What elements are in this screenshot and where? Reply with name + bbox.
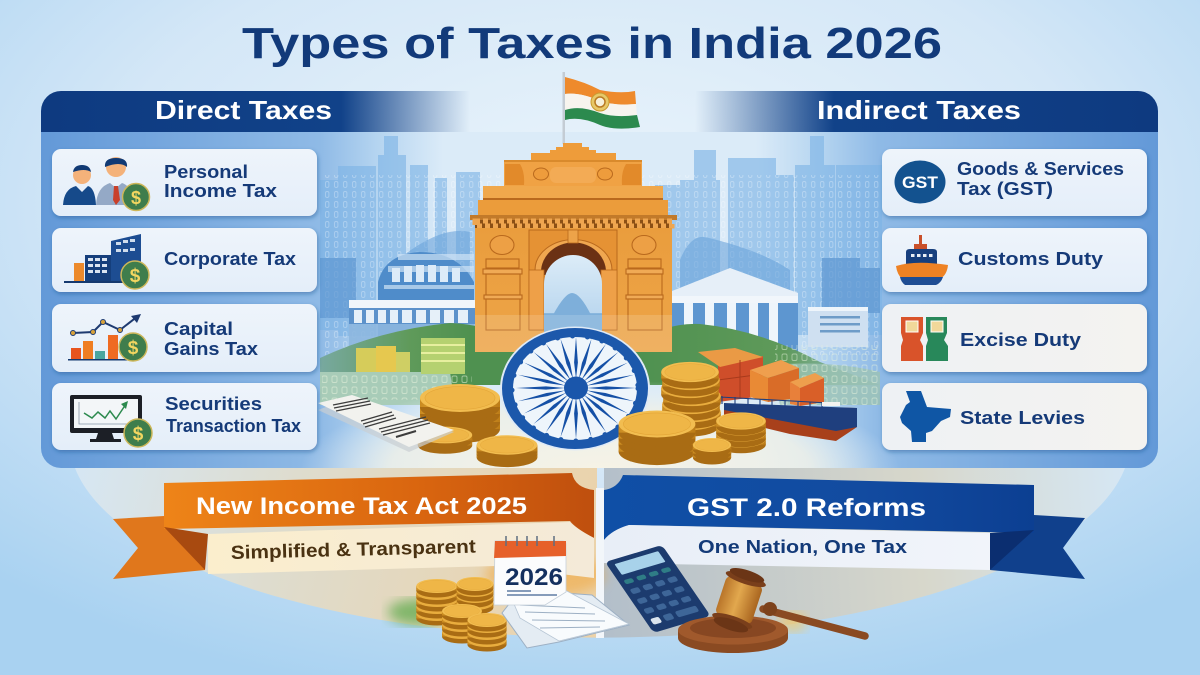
Ashoka Chakra medallion: [500, 326, 650, 450]
ribbon main: [164, 473, 594, 538]
ribbon main: [604, 475, 1034, 540]
icon: GST badge: GST: [902, 173, 939, 192]
gate body: [475, 228, 672, 352]
tax receipt document: [318, 395, 454, 452]
stack: tall: [661, 362, 721, 437]
icon: office buildings with coin: [64, 234, 149, 289]
arch recess: [529, 230, 617, 330]
sub-banner: [604, 525, 990, 570]
icon: bars, trend line and coin: [68, 314, 147, 361]
header band: Direct Taxes: [41, 91, 470, 132]
cargo ship with containers: [698, 348, 857, 441]
heading: GST 2.0 Reforms: [687, 494, 926, 522]
binary data overlay: [322, 175, 880, 355]
small container: [790, 373, 824, 388]
ribbon tail: [113, 516, 205, 579]
calendar body: [494, 541, 566, 605]
label: Personal: [164, 162, 248, 182]
gate side reliefs: [483, 236, 663, 330]
small yellow buildings: [356, 338, 465, 374]
right card: Customs Duty: [882, 228, 1147, 292]
orange container: [750, 360, 799, 378]
coin stacks around chakra: [418, 362, 766, 467]
icon: fuel pumps: [901, 317, 948, 361]
banner: New Income Tax Act 2025: [113, 473, 594, 579]
left card: Capital Gains Tax: [52, 304, 317, 372]
arch opening: [544, 255, 602, 332]
stack: front small: [693, 438, 731, 464]
red container stack: [718, 356, 763, 402]
gavel: [678, 564, 865, 653]
hazy hills: [395, 231, 790, 340]
India Gate with flag: [470, 72, 677, 352]
right card: Goods and Services Tax: [882, 149, 1147, 216]
sound block: [678, 616, 788, 653]
label: Securities: [165, 394, 262, 414]
right card: Excise Duty: [882, 304, 1147, 372]
icon: two people with coin: [63, 157, 150, 210]
header band: Indirect Taxes: Indirect Taxes: [817, 95, 1021, 125]
stack: under receipt: [418, 427, 472, 454]
green hills: [320, 323, 880, 405]
left card: Personal Income Tax: [52, 149, 317, 216]
right card: State Levies: [882, 383, 1147, 450]
icon: GST badge: [894, 160, 946, 204]
icon: monitor chart with coin: [70, 395, 152, 447]
label line 2: Transaction Tax: [166, 416, 301, 436]
skyline: right city: [655, 136, 882, 335]
right temple building: [672, 268, 798, 353]
icon: ship: [896, 235, 948, 285]
skyline: left city: [320, 136, 480, 336]
bottom translucent semi-circle: [75, 468, 1125, 638]
sub-banner: [208, 522, 594, 578]
header band: Indirect Taxes: [695, 91, 1158, 132]
hull: [724, 405, 857, 441]
calendar 2026: [494, 536, 629, 648]
header band: Direct Taxes: Direct Taxes: [155, 95, 332, 125]
stack: right: [716, 412, 766, 453]
year: 2026: [505, 564, 563, 591]
icon: monitor chart with coin: $: [133, 424, 144, 445]
label: Excise Duty: [960, 330, 1081, 350]
gate upper tiers: [470, 186, 677, 228]
attic with medallions: [504, 160, 642, 186]
central skyline illustration: [300, 136, 900, 468]
deck railing: [720, 396, 828, 410]
white centre divider: [596, 488, 604, 638]
papers: [502, 590, 629, 648]
icon: two people with coin: $: [131, 188, 141, 208]
heading: New Income Tax Act 2025: [196, 493, 527, 520]
calculator: [605, 545, 711, 633]
label line 2: Gains Tax: [164, 339, 258, 359]
left domed building: [349, 252, 476, 352]
label: State Levies: [960, 408, 1085, 428]
stack: left small: [477, 435, 537, 467]
gate stepped top: [531, 143, 616, 161]
label: Goods & Services: [957, 159, 1124, 179]
hammer head: [709, 564, 769, 636]
banner: GST 2.0 Reforms: [604, 475, 1085, 579]
subheading: Simplified & Transparent: [231, 537, 477, 564]
label: Customs Duty: [958, 249, 1103, 269]
icon: bars, trend line and coin: $: [128, 338, 139, 359]
stack: front large: [619, 411, 695, 465]
flag: [562, 72, 640, 144]
left card: Securities Transaction Tax: [52, 383, 317, 450]
subheading: One Nation, One Tax: [698, 537, 907, 557]
left card: Corporate Tax: [52, 228, 317, 292]
label: Capital: [164, 319, 233, 339]
bottom fade: [300, 380, 900, 468]
icon: office buildings with coin: $: [130, 266, 141, 287]
lower pale band on gate: [475, 315, 672, 352]
icon: state map: [900, 391, 951, 442]
label: Corporate Tax: [164, 249, 296, 269]
main panel background: [41, 132, 1158, 468]
dark foreground towers: [320, 258, 880, 318]
stack: left large: [420, 384, 500, 443]
title: Types of Taxes in India 2026: [242, 19, 942, 68]
label line 2: Tax (GST): [957, 179, 1053, 199]
handle: [763, 602, 865, 636]
far right building: [808, 307, 868, 347]
coin stacks: bottom left: [416, 577, 507, 652]
label line 2: Income Tax: [164, 181, 277, 201]
ribbon tail: [990, 515, 1085, 579]
